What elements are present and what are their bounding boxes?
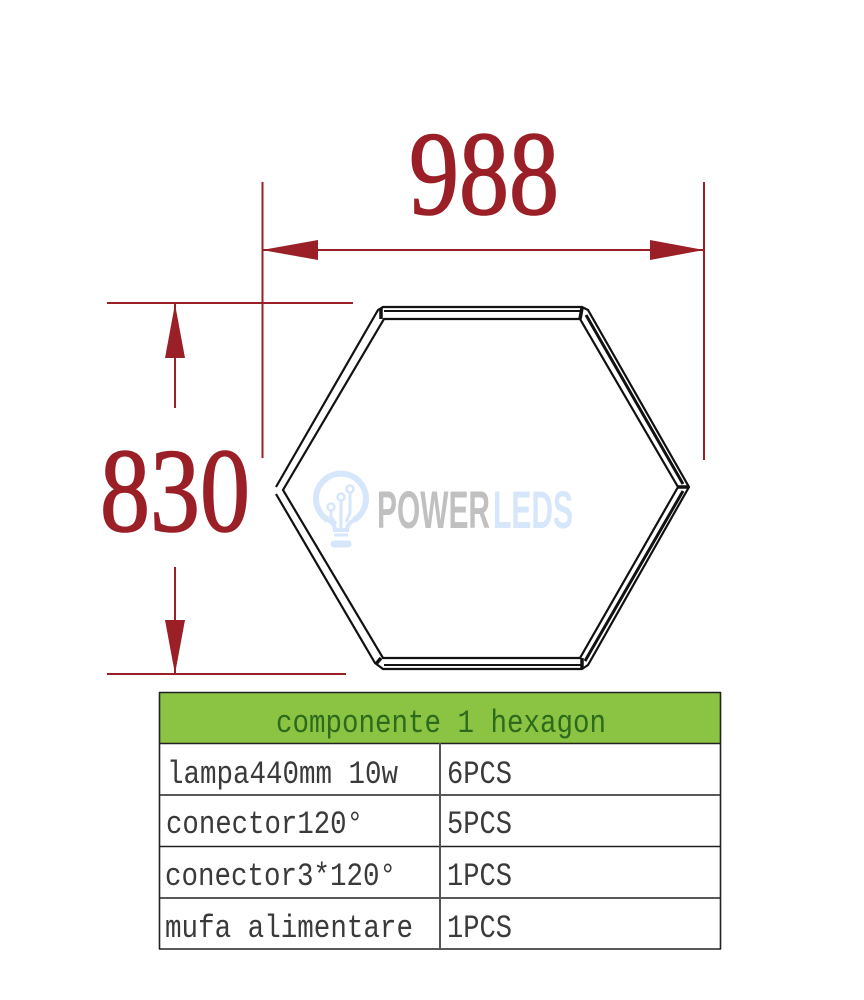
table grid [159, 692, 721, 949]
row 2: conector120° [166, 806, 363, 843]
logo text: POWER [377, 481, 490, 540]
height dimension: 830 [100, 303, 353, 674]
arrow: height top [165, 304, 185, 358]
icon: light bulb [316, 474, 366, 544]
watermark logo: POWERLEDS: LEDS [493, 481, 573, 540]
arrow: width left [262, 240, 318, 260]
watermark logo: POWERLEDS [316, 474, 573, 544]
row 1: lampa440mm 10w [167, 756, 398, 793]
row 4: mufa alimentare [165, 910, 413, 947]
width dimension: 988: 988 [409, 107, 559, 240]
hexagon lamp frame [276, 307, 689, 669]
row 3: conector3*120° [165, 858, 396, 895]
components table [159, 692, 721, 949]
table header [159, 692, 721, 743]
row 1: 6PCS [447, 756, 512, 793]
height dimension: 830: 830 [100, 424, 250, 557]
width dimension: 988 [262, 107, 704, 460]
row 2 [166, 806, 512, 843]
header text: componente 1 hexagon [276, 705, 606, 742]
row 4: 1PCS [447, 910, 512, 947]
row 3: 1PCS [447, 858, 512, 895]
arrow: width right [650, 240, 704, 260]
row 2: 5PCS [447, 806, 512, 843]
arrow: height bottom [165, 620, 185, 674]
